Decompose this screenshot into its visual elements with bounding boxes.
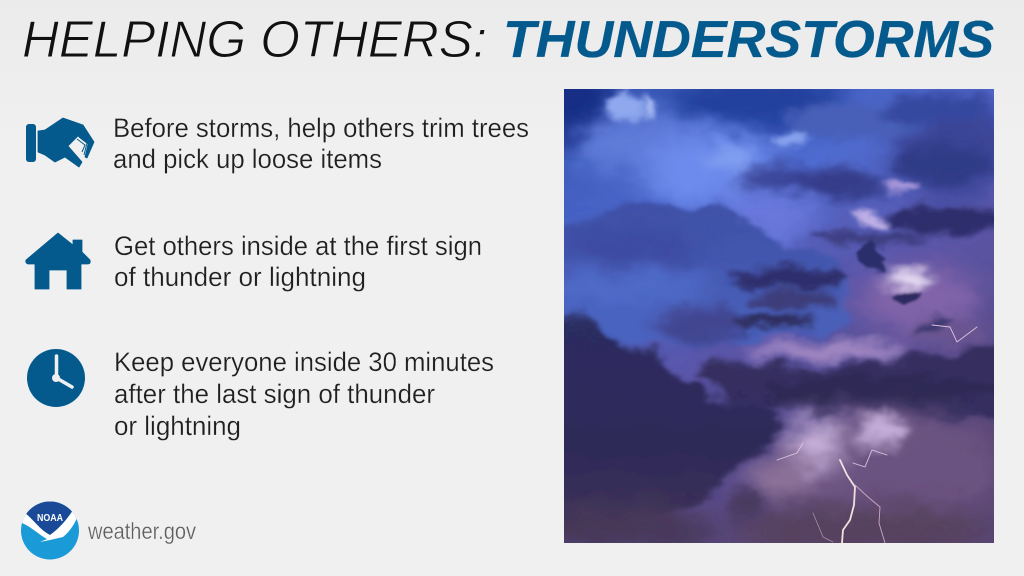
- text: trim trees: [113, 113, 529, 174]
- icon: hand picking up: [26, 118, 94, 167]
- text: stay inside: [114, 347, 494, 441]
- icon: clock: [27, 349, 85, 407]
- text: stay inside: Keep everyone inside 30 minutes: [114, 347, 494, 377]
- text: trim trees: and pick up loose items: [113, 144, 382, 174]
- title: [22, 11, 994, 69]
- title: HELPING OTHERS:: [22, 11, 487, 69]
- NOAA logo: [20, 500, 80, 560]
- item: stay inside: [27, 347, 494, 441]
- text: get inside: [114, 231, 482, 292]
- text: stay inside: or lightning: [114, 411, 241, 441]
- text: stay inside: after the last sign of thunder: [114, 379, 435, 409]
- item: trim trees: [26, 113, 529, 174]
- item: get inside: [26, 231, 482, 292]
- photo clouds: [564, 89, 994, 543]
- title: THUNDERSTORMS: [503, 11, 994, 69]
- text: trim trees: Before storms, help others trim trees: [113, 113, 529, 143]
- icon: house: [26, 233, 90, 289]
- NOAA logo: NOAA: [37, 513, 63, 524]
- text: get inside: Get others inside at the first sign: [114, 231, 482, 261]
- text: get inside: of thunder or lightning: [114, 262, 366, 292]
- weather.gov: weather.gov: [87, 518, 196, 544]
- lightning bolts: [777, 325, 977, 543]
- thunderstorm photo: [564, 89, 994, 543]
